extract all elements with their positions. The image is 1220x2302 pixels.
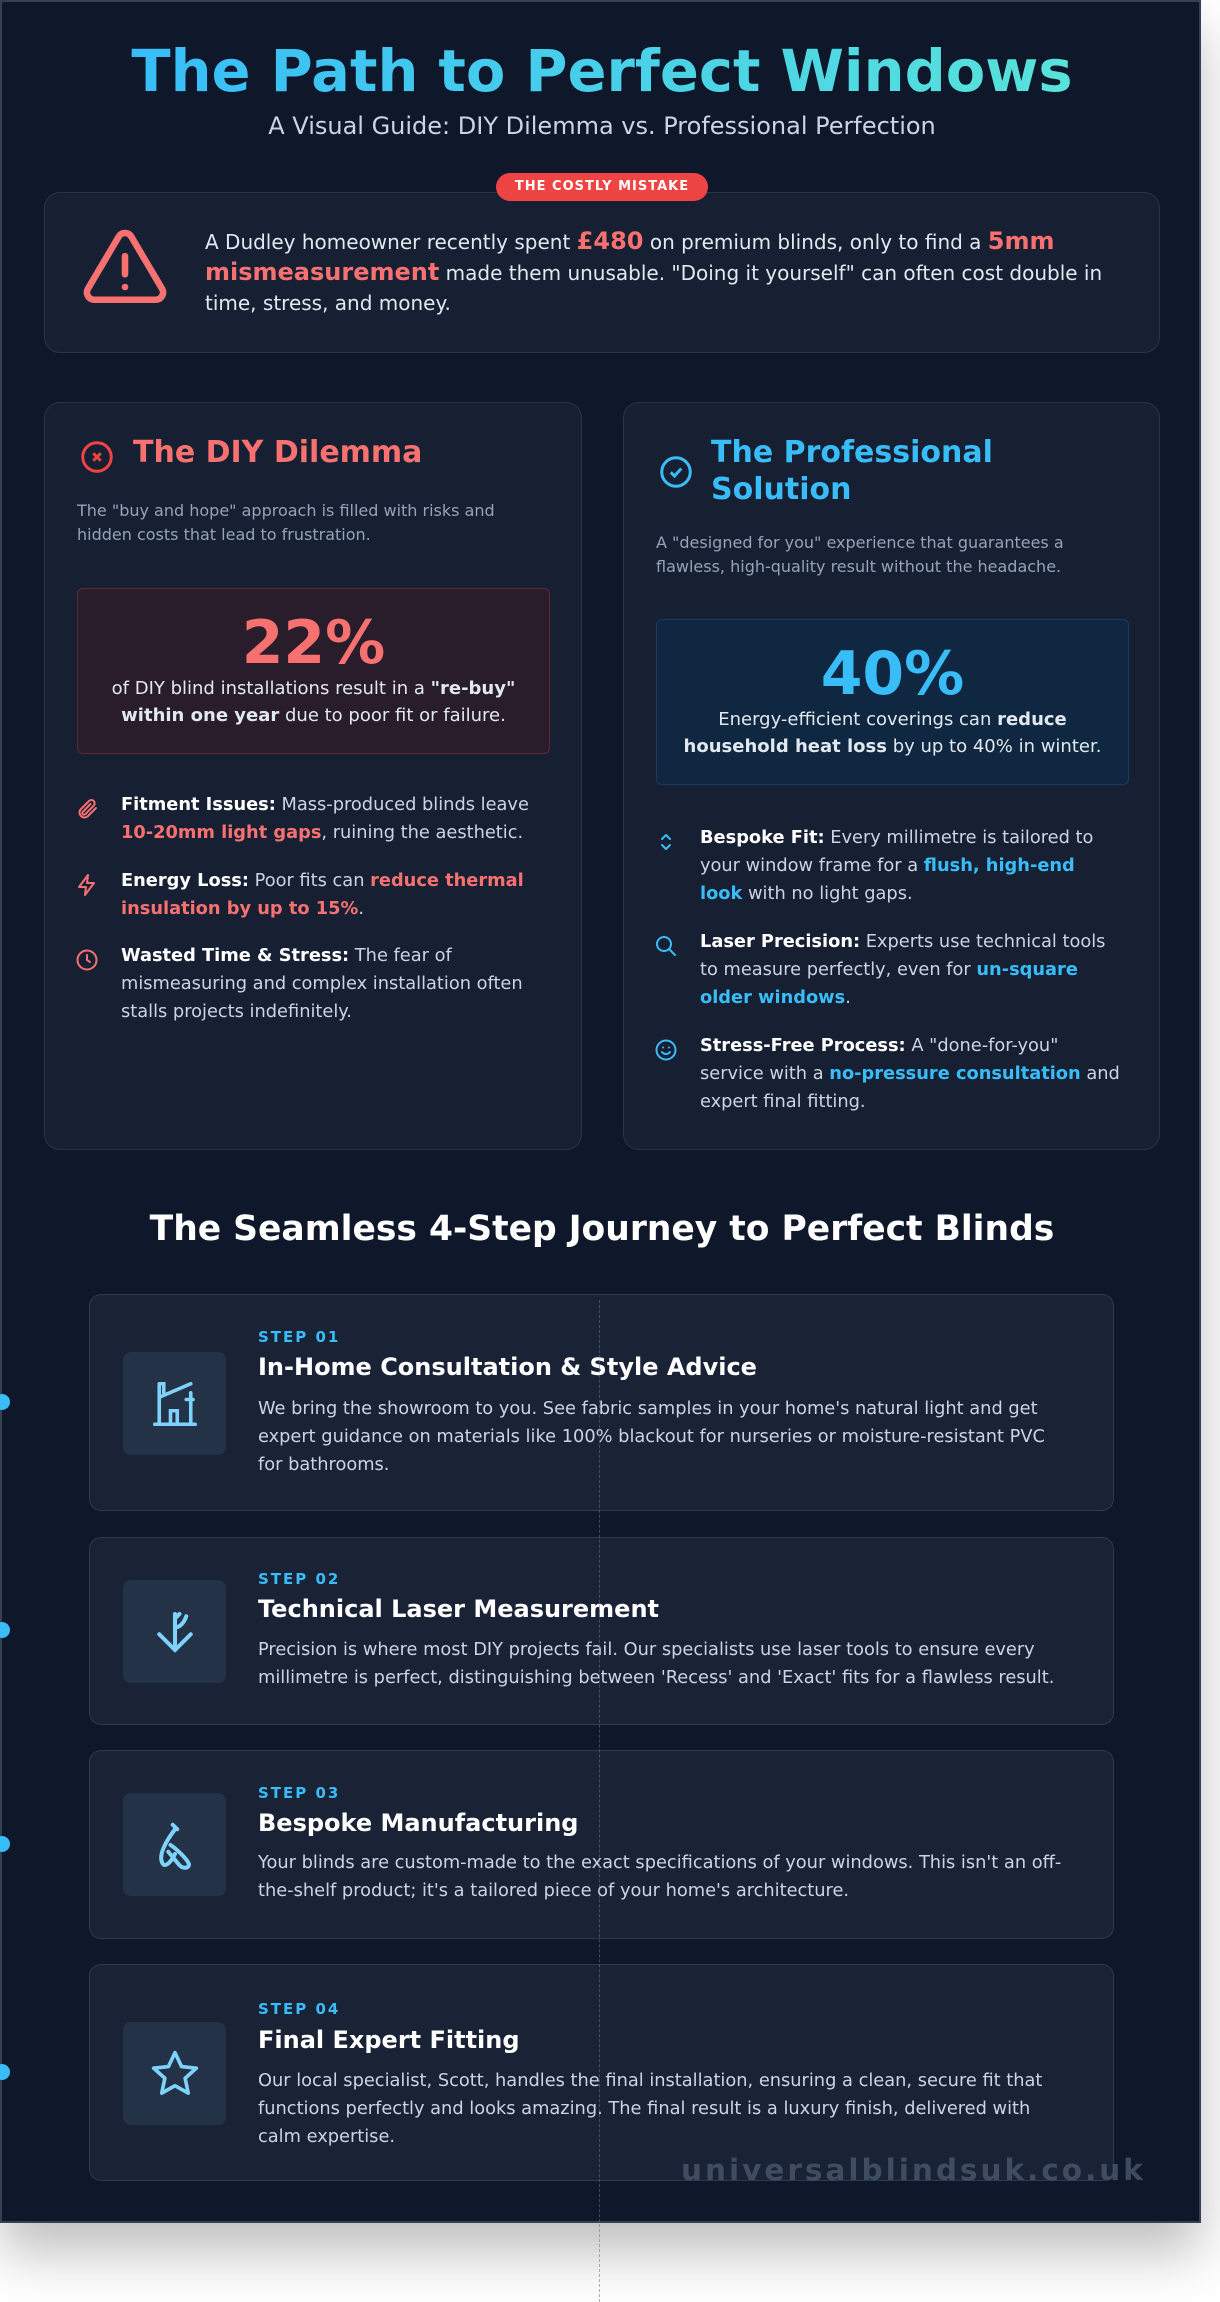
dashed timeline line [599,1300,600,2302]
item: stress-free: expert final fitting. [700,1091,866,1112]
badge: the costly mistake: THE COSTLY MISTAKE [515,179,689,194]
icon: laser [123,1580,226,1683]
stat box: 22%: of DIY blind installations result in a "re-buy" [112,678,515,699]
step 4 [89,1964,1114,2181]
item: stress-free: Stress-Free Process: A "done-for-you" [700,1035,1058,1056]
step 3: Bespoke Manufacturing [258,1809,578,1837]
step 2: STEP 02 [258,1570,340,1588]
description [656,533,1064,576]
heading: The Professional [711,435,993,470]
stat box: 40%: Energy-efficient coverings can reduce [718,709,1067,730]
step 4: functions perfectly and looks amazing. The final result is a luxury finish, delivered with [258,2098,1030,2119]
item: bespoke fit [661,827,1093,904]
description [76,501,495,544]
description: hidden costs that lead to frustration. [77,525,371,544]
step 1 [89,1294,1114,1511]
item: stress-free: service with a no-pressure consultation and [700,1063,1120,1084]
text: mistake story: time, stress, and money. [205,291,451,315]
text: mistake story: mismeasurement made them unusable. "Doing it yourself" can often cost double in [205,258,1102,286]
icon: house [123,1352,226,1455]
item: energy loss [78,870,524,919]
step 4: Our local specialist, Scott, handles the final installation, ensuring a clean, secure fit that [258,2070,1042,2091]
title: The Path to Perfect Windows [131,38,1073,105]
subtitle: A Visual Guide: DIY Dilemma vs. Professional Perfection [268,112,936,140]
watermark: universalblindsuk.co.uk [681,2153,1146,2187]
heading: The DIY Dilemma [133,435,422,470]
stat box: 40%: household heat loss by up to 40% in winter. [684,736,1101,757]
stat box: 40%: 40% [821,639,964,709]
item: bespoke fit: your window frame for a flush, high-end [700,855,1075,876]
step 3: the-shelf product; it's a tailored piece of your home's architecture. [258,1880,849,1901]
heading: 4-step journey: The Seamless 4-Step Journey to Perfect Blinds [150,1209,1054,1249]
item: stress-free [656,1035,1120,1112]
panel: professional solution [623,402,1160,1150]
step 4: STEP 04 [258,2000,340,2018]
step 2: Technical Laser Measurement [258,1595,659,1623]
item: wasted time: stalls projects indefinitely. [121,1001,352,1022]
step 1: STEP 01 [258,1328,340,1346]
item: energy loss: insulation by up to 15%. [121,898,364,919]
item: wasted time: mismeasuring and complex installation often [121,973,523,994]
icon: x circle [81,441,113,473]
step 3: Your blinds are custom-made to the exact specifications of your windows. This isn't an off- [258,1852,1061,1873]
step 2 [89,1537,1114,1725]
step 3: STEP 03 [258,1784,340,1802]
text: mistake story: A Dudley homeowner recently spent £480 on premium blinds, only to find a 5mm [205,227,1055,255]
item: wasted time [76,945,523,1022]
step 1: for bathrooms. [258,1454,389,1475]
stat box: 40% [656,619,1129,785]
item: wasted time: Wasted Time & Stress: The fear of [121,945,452,966]
description: The "buy and hope" approach is filled with risks and [77,501,495,520]
panel: DIY dilemma [44,402,582,1150]
item: fitment issues: Fitment Issues: Mass-produced blinds leave [121,794,529,815]
badge: the costly mistake [496,173,708,201]
heading: Solution [711,472,851,507]
panel: costly mistake [44,192,1160,353]
icon: tools [123,1793,226,1896]
text: mistake story [205,227,1102,315]
description: flawless, high-quality result without the headache. [656,557,1061,576]
description: A "designed for you" experience that guarantees a [656,533,1064,552]
step 1: expert guidance on materials like 100% blackout for nurseries or moisture-resistant PVC [258,1426,1045,1447]
item: laser precision: older windows. [700,987,851,1008]
step 2: millimetre is perfect, distinguishing between 'Recess' and 'Exact' fits for a flawless result. [258,1667,1054,1688]
step 4: Final Expert Fitting [258,2026,520,2054]
item: laser precision [656,931,1105,1008]
step 1: In-Home Consultation & Style Advice [258,1353,757,1381]
item: bespoke fit: Bespoke Fit: Every millimetre is tailored to [700,827,1093,848]
item: fitment issues: 10-20mm light gaps, ruining the aesthetic. [121,822,523,843]
item: energy loss: Energy Loss: Poor fits can reduce thermal [121,870,524,891]
step 3 [89,1750,1114,1939]
item: bespoke fit: look with no light gaps. [700,883,913,904]
stat box: 22%: within one year due to poor fit or failure. [121,705,506,726]
heading [711,435,993,507]
stat box: 22%: 22% [242,608,385,678]
item: laser precision: Laser Precision: Experts use technical tools [700,931,1105,952]
stat box: 22% [77,588,550,754]
icon: check circle [660,456,692,488]
item: laser precision: to measure perfectly, even for un-square [700,959,1078,980]
step 2: Precision is where most DIY projects fail. Our specialists use laser tools to ensure every [258,1639,1035,1660]
icon: warning [84,230,166,303]
item: fitment issues [78,794,529,843]
step 1: We bring the showroom to you. See fabric samples in your home's natural light and get [258,1398,1038,1419]
icon: star [123,2022,226,2125]
timeline dots [0,1394,10,2080]
step 4: calm expertise. [258,2126,395,2147]
